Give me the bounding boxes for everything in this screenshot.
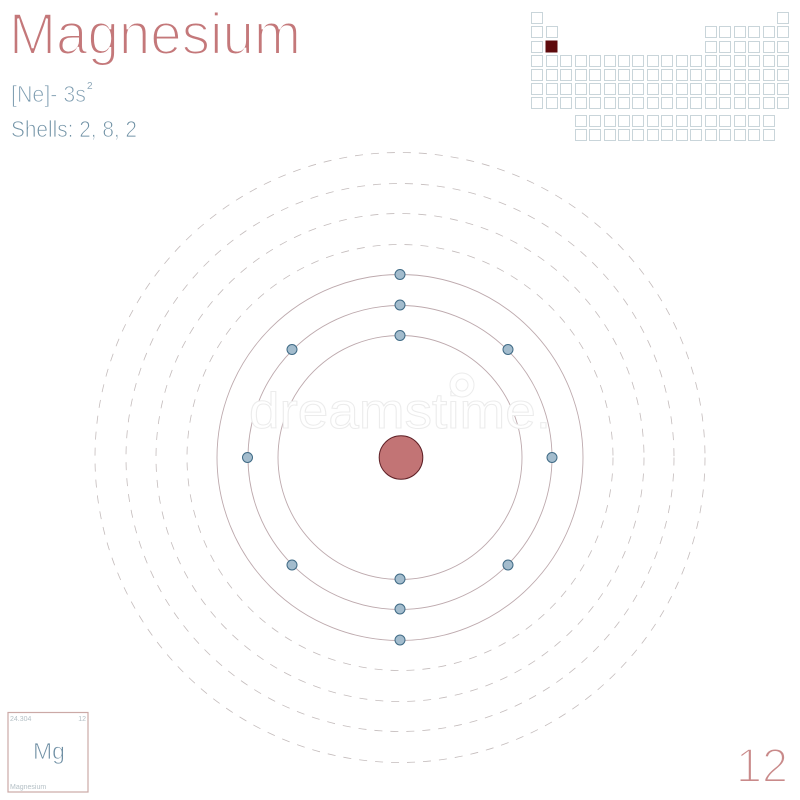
periodic table locator <box>532 12 788 140</box>
element card <box>8 712 88 792</box>
highlighted cell: magnesium <box>546 41 557 52</box>
element card: 12 <box>78 716 86 723</box>
nucleus <box>379 436 423 479</box>
element card: Mg <box>33 738 65 764</box>
electron configuration: [Ne]- 3s <box>11 81 86 107</box>
electron configuration: 2 <box>87 81 93 92</box>
title: Magnesium <box>9 2 301 67</box>
electrons <box>242 270 557 645</box>
occupied shells <box>217 274 583 640</box>
empty dashed shells <box>95 152 705 762</box>
element card: Magnesium <box>10 784 46 791</box>
element card: 24.304 <box>10 716 32 723</box>
atomic number: 12 <box>736 740 788 793</box>
shell counts: Shells: 2, 8, 2 <box>11 116 137 142</box>
watermark: dreamstime. <box>249 383 551 439</box>
